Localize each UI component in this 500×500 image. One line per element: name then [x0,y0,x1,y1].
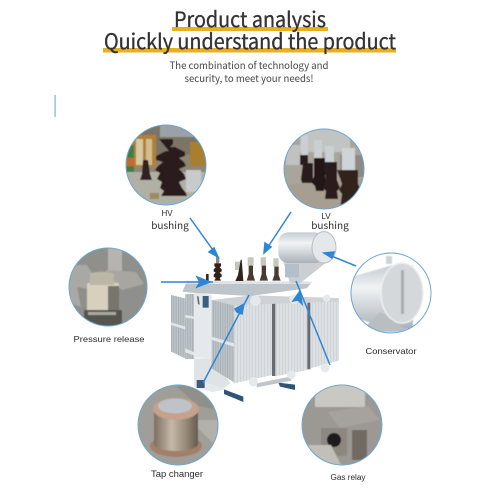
label: HV bushing: bushing [151,217,189,232]
arrow: conservator [324,252,356,266]
title [103,4,396,56]
subtitle [170,57,328,85]
label: HV bushing: HV [161,209,173,218]
arrow: tap changer [203,295,249,383]
photo: tap changer [138,385,220,465]
valve [197,380,205,388]
dark seams [272,303,275,376]
subtitle: security, to meet your needs! [184,70,314,85]
photo: HV bushing [126,124,206,206]
arrow: gas relay [293,281,330,365]
label: LV bushing: LV [321,212,331,221]
arrow: LV bushing [264,212,291,253]
label: gas relay: Gas relay [330,473,366,482]
HV bushing stack [216,257,219,265]
photo: conservator [350,252,432,334]
relay [285,264,299,277]
label: pressure release: Pressure release [74,334,145,344]
conservator tank [278,232,325,263]
inner column [185,294,194,359]
title underline: first line [172,27,328,31]
subtitle: The combination of technology and [170,57,328,72]
header pipes [212,295,338,305]
conservator arm [283,255,329,283]
label: LV bushing: bushing [311,217,349,232]
photo: LV bushing [284,128,364,210]
transformer [171,232,339,402]
front radiators [212,300,234,382]
title line 2: Quickly understand the product [104,26,396,56]
left radiator [171,295,185,358]
label: conservator: Conservator [366,346,417,356]
photo: pressure release [68,247,148,328]
tank cover [182,282,312,296]
arrow: HV bushing [190,218,218,257]
accent line [54,95,56,117]
title underline: second line [103,48,396,52]
LV bushing stacks [235,262,240,270]
side wall [194,292,226,392]
title line 1: Product analysis [174,4,326,34]
nameplate [203,296,209,308]
photo: gas relay [302,385,382,465]
label: tap changer: Tap changer [151,469,203,479]
label: HV bushing [151,209,189,232]
arrow: pressure release [161,277,213,287]
base rails [224,389,243,402]
